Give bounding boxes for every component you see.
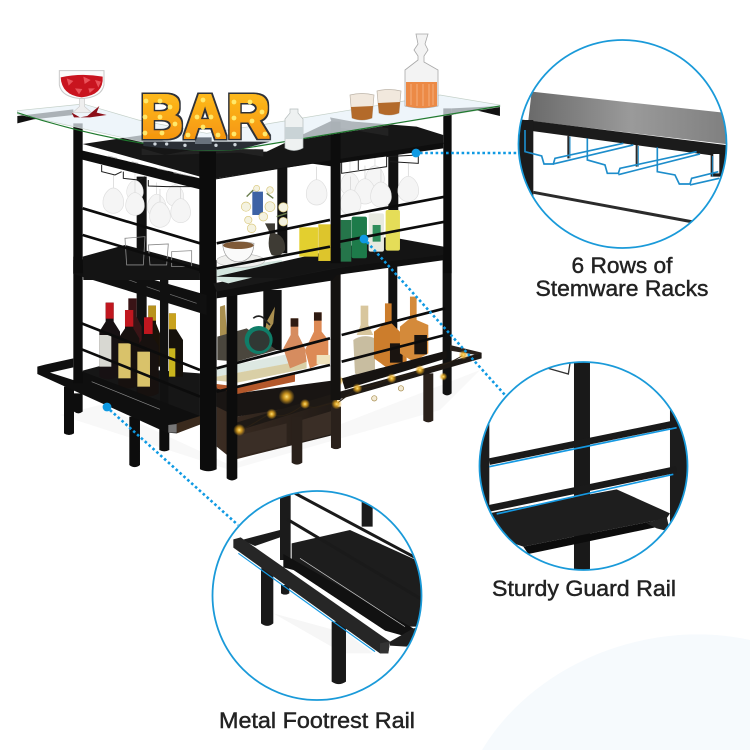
cans [299, 210, 400, 262]
dotted line: footrest [110, 410, 238, 525]
callout dot: stemware racks [412, 149, 420, 157]
stemware racks [102, 152, 418, 187]
whisky tumblers [350, 90, 401, 120]
posts [280, 493, 373, 560]
bar table illustration [17, 34, 500, 480]
heading: 6 Rows of Stemware Racks: Stemware Racks [536, 276, 708, 301]
floor shadow [273, 613, 373, 653]
wine glasses right [306, 154, 419, 215]
callout dot: footrest [103, 403, 111, 411]
stacked books [217, 354, 307, 394]
BAR base [143, 137, 270, 150]
flower vase [241, 185, 288, 256]
plate and cup [217, 242, 265, 267]
tumblers on middle shelf [125, 237, 192, 267]
glass tabletop [17, 95, 500, 150]
upper rail [489, 423, 677, 462]
blue rack wires [568, 136, 712, 177]
back posts [137, 147, 398, 267]
heading: Metal Footrest Rail: Metal Footrest Rail [219, 708, 415, 733]
footrest rail [233, 537, 390, 653]
panel: metal footrest detail [212, 491, 423, 700]
shelf [480, 489, 670, 547]
shelf [292, 530, 423, 627]
wine glasses left [103, 170, 191, 227]
rack fragment [548, 363, 570, 374]
top shelf [83, 120, 443, 178]
guard rails [290, 494, 414, 558]
white gap [293, 570, 385, 636]
legs [261, 568, 346, 684]
left beam [77, 149, 200, 189]
panel: stemware racks detail [517, 40, 733, 248]
center post [574, 360, 590, 573]
lower table structure [37, 247, 482, 480]
middle shelf beams [73, 247, 445, 315]
heading: Sturdy Guard Rail: Sturdy Guard Rail [492, 576, 676, 601]
background swoosh [482, 634, 750, 750]
footrest right [232, 353, 482, 433]
posts [73, 108, 452, 273]
side posts [480, 410, 687, 522]
blue edge highlight [238, 553, 375, 652]
right legs [292, 373, 433, 465]
crystal decanter [405, 34, 438, 108]
cabinet drawers [217, 387, 340, 460]
right beam [216, 143, 443, 179]
callout dot: guard rail [360, 235, 368, 243]
heading: 6 Rows of Stemware Racks: 6 Rows of [572, 253, 673, 278]
left back post lower [73, 260, 83, 383]
left legs [64, 387, 169, 467]
floor shadow [60, 370, 480, 470]
bottom shelf left [83, 366, 200, 417]
shelf top [528, 92, 733, 145]
wine bottles [99, 298, 183, 396]
lower guard rails [82, 308, 445, 397]
post at right of bottom section [331, 260, 341, 400]
cocktail shaker [285, 109, 303, 150]
posts [519, 120, 725, 196]
bottom shelf right [342, 351, 447, 389]
upper table structure [17, 95, 500, 280]
side bar [242, 530, 280, 546]
front legs [200, 260, 237, 480]
lower rail [533, 192, 697, 223]
back interior posts [137, 260, 452, 410]
inner beam [283, 554, 413, 637]
fairy lights [233, 350, 468, 436]
top brackets [142, 117, 388, 157]
upper guard rails [83, 197, 445, 270]
front beam [522, 120, 726, 156]
BAR marquee letters: BAR [140, 83, 270, 152]
heading: 6 Rows of Stemware Racks [536, 253, 708, 301]
champagne and alarm clock [217, 305, 277, 362]
liquor bottles [283, 297, 428, 375]
dotted line: stemware racks [420, 152, 518, 154]
footrest left [37, 358, 202, 433]
dotted line: guard rail [367, 242, 505, 395]
panel: guard rail detail [477, 360, 690, 573]
lower rail [489, 469, 677, 508]
middle shelf [83, 237, 443, 280]
bowl of red petals [59, 71, 107, 117]
